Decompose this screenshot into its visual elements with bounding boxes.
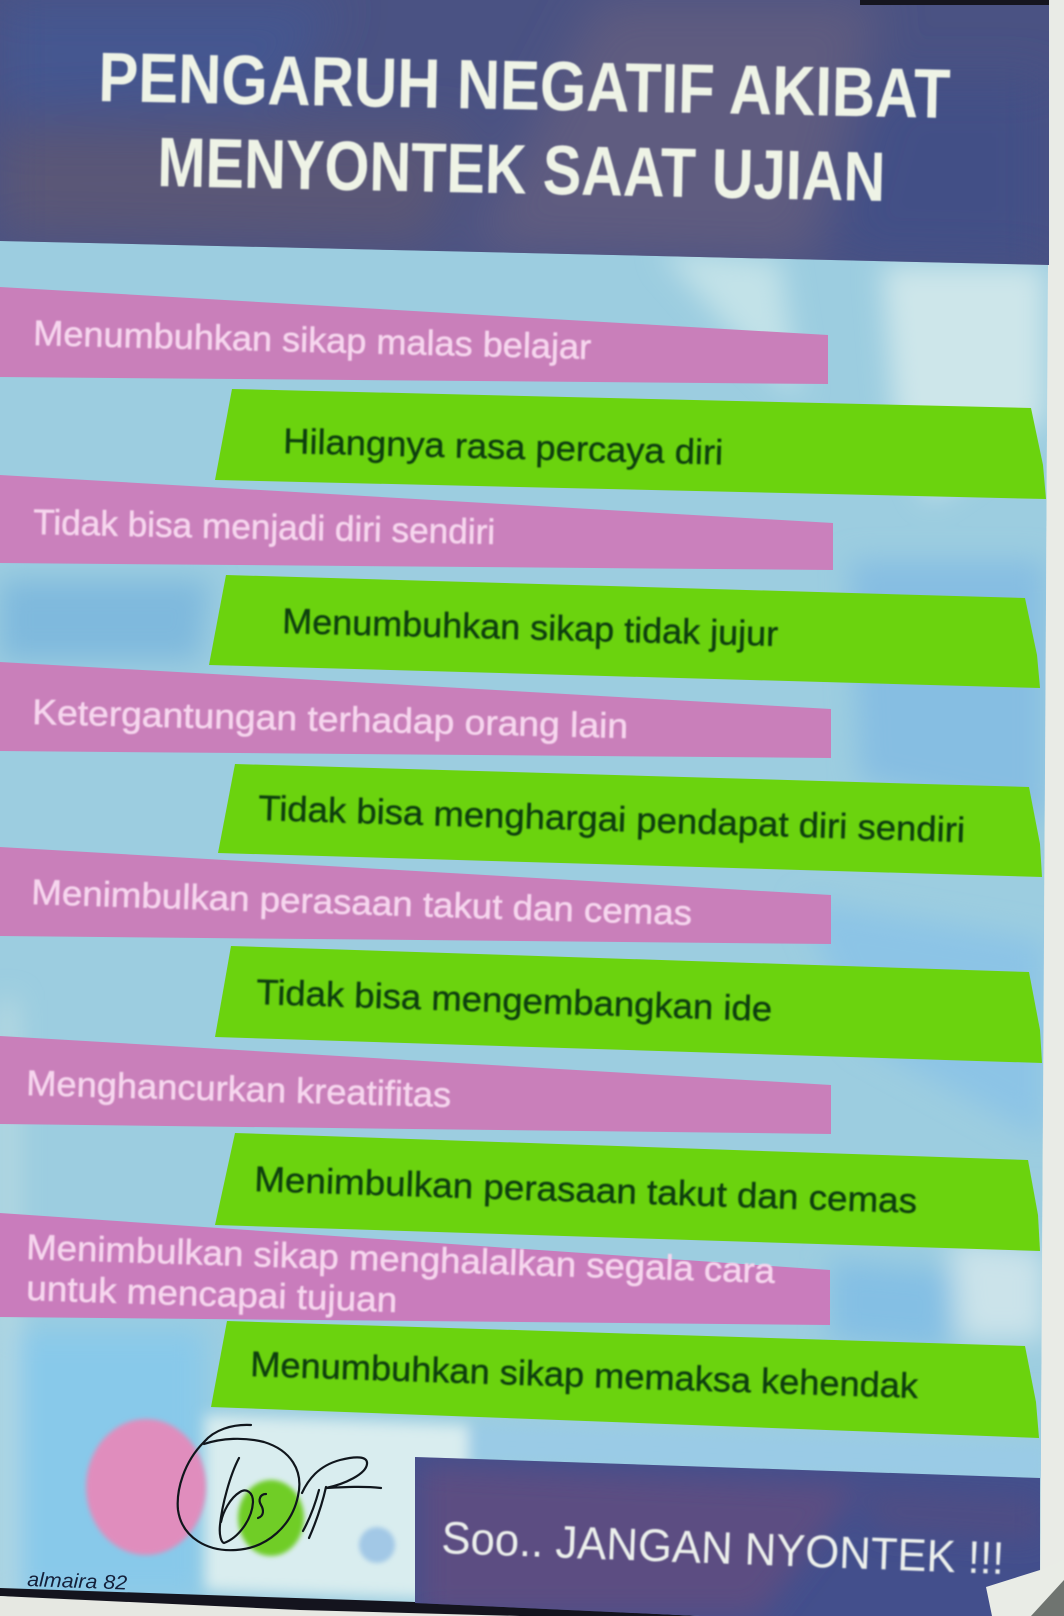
green item 6: Menumbuhkan sikap memaksa kehendak [250,1345,919,1406]
green item 4: Tidak bisa mengembangkan ide [256,973,773,1029]
green item 1 [215,389,1046,499]
footer message: Soo.. JANGAN NYONTEK !!! [441,1512,1005,1584]
decorative circle: blue [359,1527,395,1563]
footer panel [415,1457,1040,1616]
green item 5 [215,1133,1040,1251]
paper below edge [0,1596,520,1616]
pink item 1: Menumbuhkan sikap malas belajar [33,314,592,367]
green item 5: Menimbulkan perasaan takut dan cemas [254,1160,918,1221]
pink item 6: untuk mencapai tujuan [26,1269,398,1320]
pink item 4 [0,847,831,944]
decorative circle: pink [86,1419,206,1555]
title: MENYONTEK SAAT UJIAN [157,123,886,216]
green item 4 [215,946,1042,1063]
torn paper corner [986,1560,1064,1616]
header panel [0,0,1049,265]
pink item 5: Menghancurkan kreatifitas [26,1064,452,1115]
bottom black edge [0,1588,700,1616]
title [98,38,951,216]
green item 3: Tidak bisa menghargai pendapat diri sendiri [258,789,966,850]
pink item 5 [0,1036,831,1134]
green item 3 [218,764,1042,877]
pink item 2 [0,475,833,570]
pink item 4: Menimbulkan perasaan takut dan cemas [31,873,693,933]
green item 1: Hilangnya rasa percaya diri [283,422,724,473]
pink item 3: Ketergantungan terhadap orang lain [32,693,629,746]
pink item 6: Menimbulkan sikap menghalalkan segala cara [26,1228,776,1291]
pink item 1 [0,287,828,384]
decorative circle: green [238,1480,304,1556]
pink item 2: Tidak bisa menjadi diri sendiri [33,503,496,552]
pink item 6 [0,1213,830,1325]
green item 2: Menumbuhkan sikap tidak jujur [282,602,779,654]
green item 6 [211,1321,1039,1438]
student name note: almaira 82 [27,1569,128,1594]
green item 2 [209,575,1040,688]
handwritten score and signature [178,1425,381,1550]
pink item 3 [0,662,831,758]
